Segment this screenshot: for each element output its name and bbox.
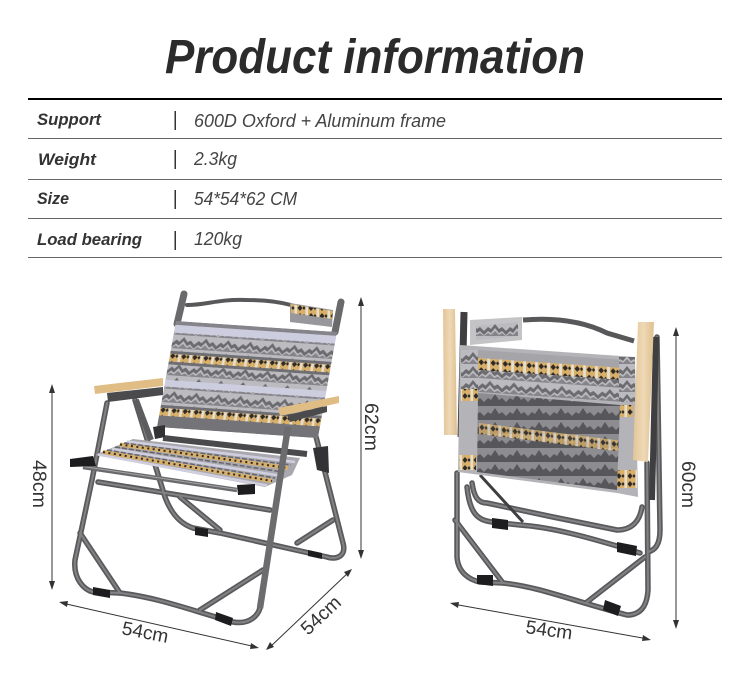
width arrow 54cm <box>59 601 259 649</box>
label 54cm: 54cm <box>524 617 574 644</box>
row: support: Support <box>37 110 102 129</box>
wood armrest right <box>633 322 654 462</box>
row: weight: 2.3kg <box>193 149 237 169</box>
label 54cm side: 54cm <box>297 592 346 640</box>
row: size <box>37 189 297 209</box>
backrest fabric <box>458 345 638 497</box>
row: weight: Weight <box>38 150 97 169</box>
rear frame <box>75 400 344 623</box>
front frame post <box>260 427 288 608</box>
title: Product information <box>165 31 585 84</box>
hinges <box>153 425 329 473</box>
row: weight <box>38 149 237 169</box>
backrest fabric <box>157 321 337 438</box>
label 62cm: 62cm <box>360 403 381 451</box>
seat height arrow 48cm <box>49 384 55 590</box>
row: load bearing <box>37 229 242 250</box>
wood armrest left <box>443 309 457 435</box>
dark side uprights <box>461 312 656 522</box>
backrest uprights and top handle <box>177 294 341 332</box>
top handle <box>523 319 634 341</box>
folded frame <box>455 337 660 615</box>
headrest pad <box>470 317 522 345</box>
black feet <box>477 518 637 616</box>
rear seat rail <box>163 438 307 454</box>
row: size: 54*54*62 CM <box>194 189 297 209</box>
black end caps and feet <box>70 456 322 626</box>
label 48cm: 48cm <box>28 460 49 508</box>
height arrow 62cm <box>358 297 364 559</box>
width arrow 54cm <box>450 602 651 641</box>
side strip patterns <box>461 350 478 392</box>
row: load bearing: 120kg <box>194 229 242 249</box>
seat fabric <box>95 439 300 487</box>
row: size: Size <box>37 189 69 208</box>
mesh pocket <box>477 393 620 490</box>
label 54cm front: 54cm <box>120 618 170 648</box>
label 60cm: 60cm <box>677 461 698 508</box>
row: load bearing: Load bearing <box>37 230 143 249</box>
mesh gold stripe <box>479 423 618 451</box>
headrest pad <box>290 303 333 327</box>
row: support: 600D Oxford + Aluminum frame <box>194 111 446 131</box>
right armrest <box>278 396 339 422</box>
chair: unfolded, with dimensions <box>28 294 381 650</box>
seat rails <box>83 466 237 490</box>
row: support <box>37 110 446 131</box>
left armrest <box>94 378 163 440</box>
upper pattern <box>478 350 622 402</box>
specification table <box>28 98 722 258</box>
depth arrow 54cm <box>266 569 352 650</box>
chair: folded, with dimensions <box>443 309 698 644</box>
height arrow 60cm <box>673 327 679 629</box>
